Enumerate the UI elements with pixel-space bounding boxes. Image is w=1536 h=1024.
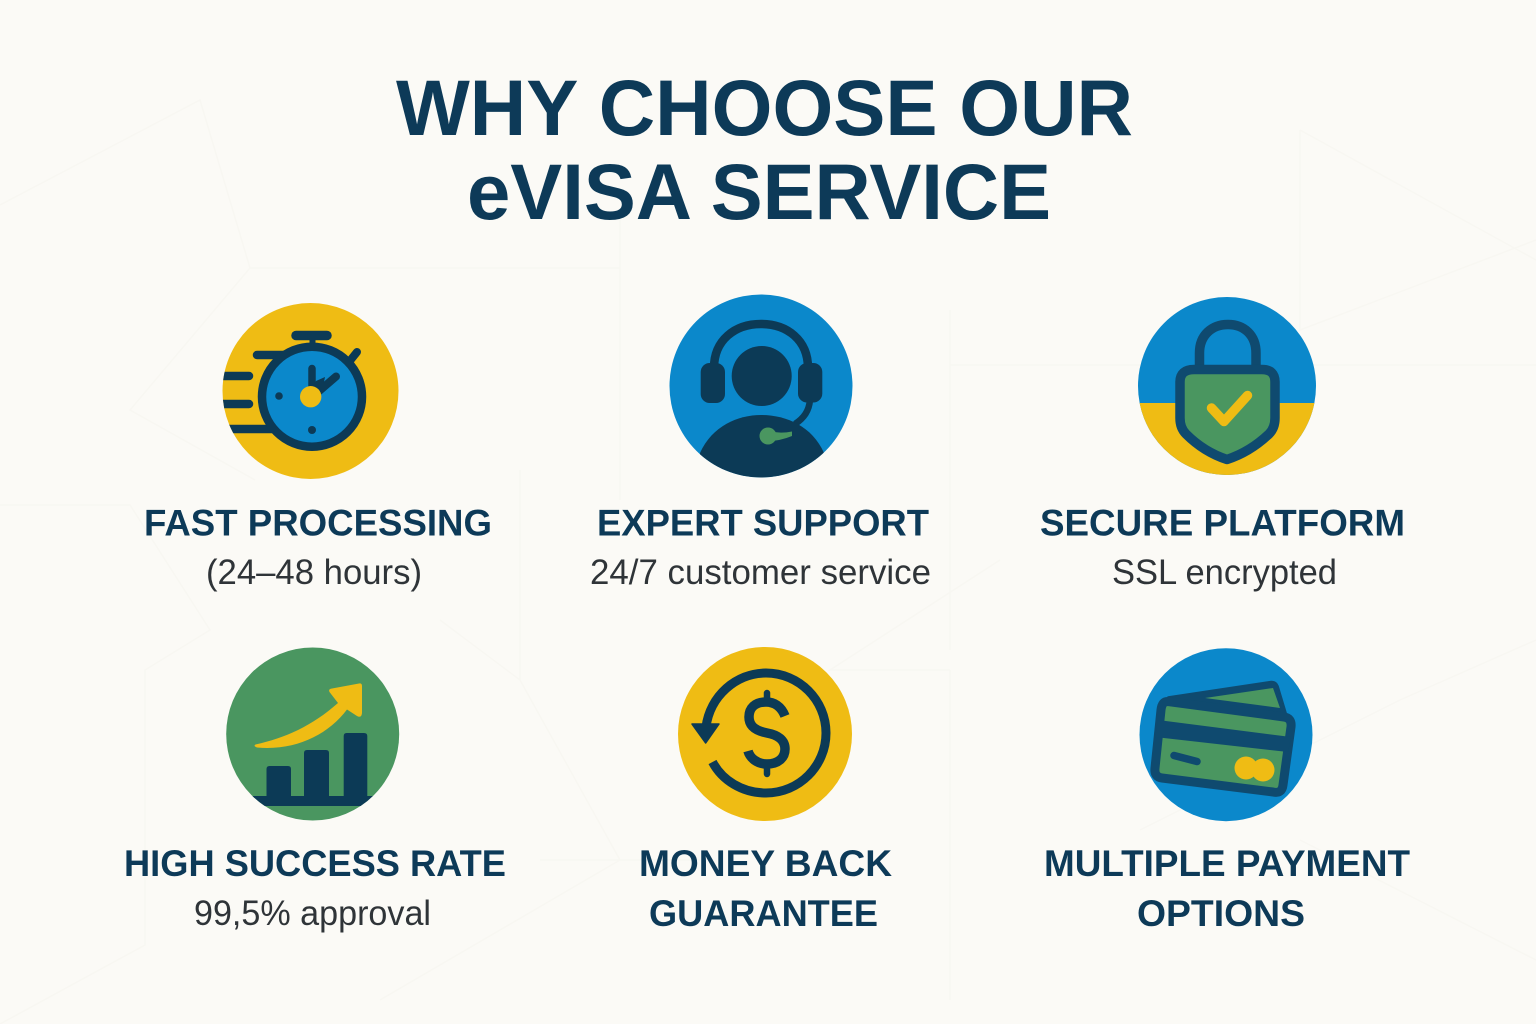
panel: money back guarantee	[639, 647, 892, 934]
icon: dollar refund	[678, 647, 852, 821]
text: 24-48 hours: (24–48 hours)	[206, 553, 422, 592]
heading: multiple payment options: MULTIPLE PAYMENT	[1044, 843, 1410, 884]
icon: stopwatch	[215, 303, 398, 479]
title: WHY CHOOSE OUR	[396, 63, 1133, 152]
icon: headset agent	[670, 294, 852, 490]
icon: credit cards	[1140, 648, 1312, 821]
heading: high success rate: HIGH SUCCESS RATE	[124, 843, 506, 884]
title	[396, 63, 1133, 236]
panel: fast processing	[144, 303, 492, 592]
panel: secure platform	[1040, 297, 1405, 592]
title: eVISA SERVICE	[467, 147, 1051, 236]
text: approval: 99,5% approval	[194, 894, 431, 933]
panel: expert support	[590, 294, 931, 592]
heading: fast processing: FAST PROCESSING	[144, 502, 492, 544]
heading: money back guarantee: MONEY BACK	[639, 843, 892, 884]
heading: secure platform: SECURE PLATFORM	[1040, 502, 1405, 544]
icon: rising bar chart	[220, 648, 410, 820]
panel: high success rate	[124, 648, 506, 933]
heading: expert support: EXPERT SUPPORT	[597, 502, 929, 544]
panel: money back guarantee: GUARANTEE	[649, 893, 878, 934]
text: customer service: 24/7 customer service	[590, 553, 931, 592]
panel: multiple payment options: OPTIONS	[1137, 893, 1305, 934]
text: ssl encrypted: SSL encrypted	[1112, 553, 1337, 592]
icon: padlock shield	[1138, 297, 1316, 475]
panel: multiple payment options	[1044, 648, 1410, 934]
